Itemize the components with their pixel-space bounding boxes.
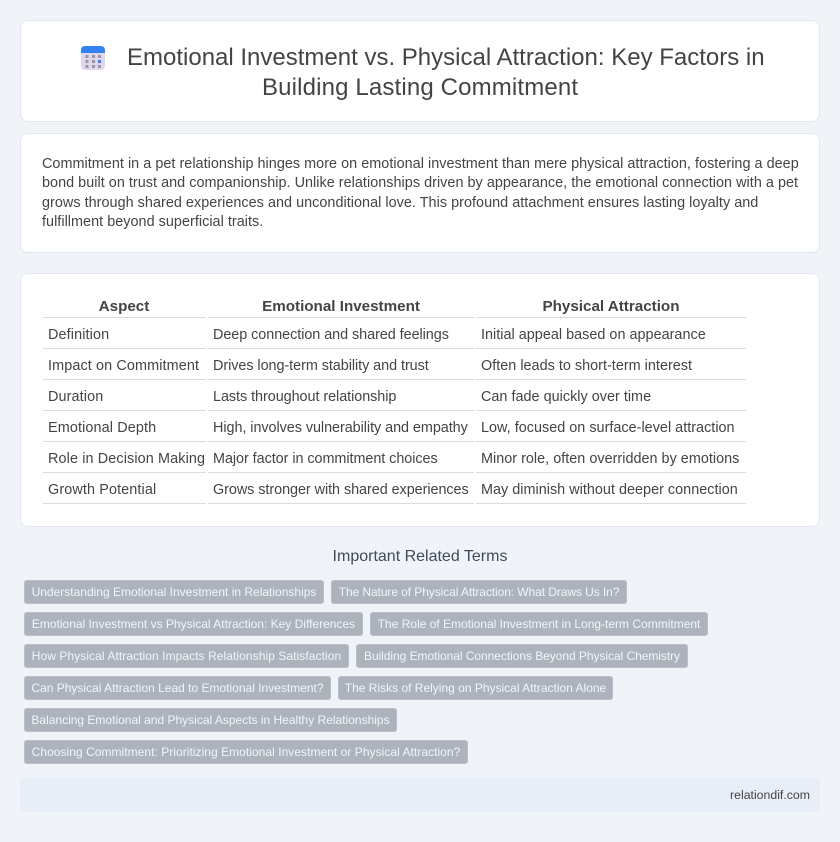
intro text: fulfillment beyond superficial traits. [42,214,263,230]
panel: intro paragraph [20,133,820,253]
related term tags: Emotional Investment vs Physical Attraction: Key Differences [32,617,355,631]
comparison table: Minor role, often overridden by emotions [481,451,739,467]
comparison table: High, involves vulnerability and empathy [213,420,468,436]
comparison table: Drives long-term stability and trust [213,358,429,374]
title [127,44,765,101]
related term tags: How Physical Attraction Impacts Relationship Satisfaction [32,649,341,663]
comparison table: Grows stronger with shared experiences [213,482,469,498]
comparison table: Major factor in commitment choices [213,451,438,467]
comparison table: Deep connection and shared feelings [213,327,449,343]
table header: Physical Attraction [542,298,680,315]
panel: comparison table [20,273,820,527]
comparison table [43,298,746,504]
intro text: grows through shared experiences and unconditional love. This profound attachment ensures lasting loyalty and [42,195,758,211]
comparison table: Often leads to short-term interest [481,358,692,374]
related term tags: The Nature of Physical Attraction: What Draws Us In? [339,585,619,599]
comparison table: May diminish without deeper connection [481,482,738,498]
comparison table: Impact on Commitment [48,358,199,374]
related term tags: Choosing Commitment: Prioritizing Emotional Investment or Physical Attraction? [32,745,460,759]
intro text: Commitment in a pet relationship hinges more on emotional investment than mere physical attraction, fostering a deep [42,156,799,172]
related term tags: The Risks of Relying on Physical Attraction Alone [345,681,606,695]
comparison table: Role in Decision Making [48,451,205,467]
icon: calendar [81,46,105,70]
intro text: bond built on trust and companionship. Unlike relationships driven by appearance, the emotional connection with a pet [42,175,798,191]
related term tags: The Role of Emotional Investment in Long-term Commitment [378,617,700,631]
related term tags [24,580,708,764]
intro text [42,156,799,230]
related terms heading: Important Related Terms [333,548,507,565]
comparison table: Growth Potential [48,482,156,498]
table header [99,298,680,315]
comparison table: Lasts throughout relationship [213,389,396,405]
comparison table: Emotional Depth [48,420,156,436]
comparison table: Low, focused on surface-level attraction [481,420,735,436]
title: Emotional Investment vs. Physical Attraction: Key Factors in [127,44,765,71]
table header: Aspect [99,298,149,315]
footer bar: relationdif.com [730,788,810,802]
related term tags: Can Physical Attraction Lead to Emotional Investment? [31,681,324,695]
comparison table: Can fade quickly over time [481,389,651,405]
footer bar [20,778,820,812]
related term tags: Understanding Emotional Investment in Relationships [32,585,316,599]
comparison table: Definition [48,327,109,343]
table header: Emotional Investment [262,298,420,315]
related term tags: Balancing Emotional and Physical Aspects in Healthy Relationships [31,713,390,727]
comparison table: Duration [48,389,103,405]
header card [20,20,820,122]
comparison table: Initial appeal based on appearance [481,327,706,343]
title: Building Lasting Commitment [262,74,578,101]
related term tags: Building Emotional Connections Beyond Physical Chemistry [364,649,680,663]
